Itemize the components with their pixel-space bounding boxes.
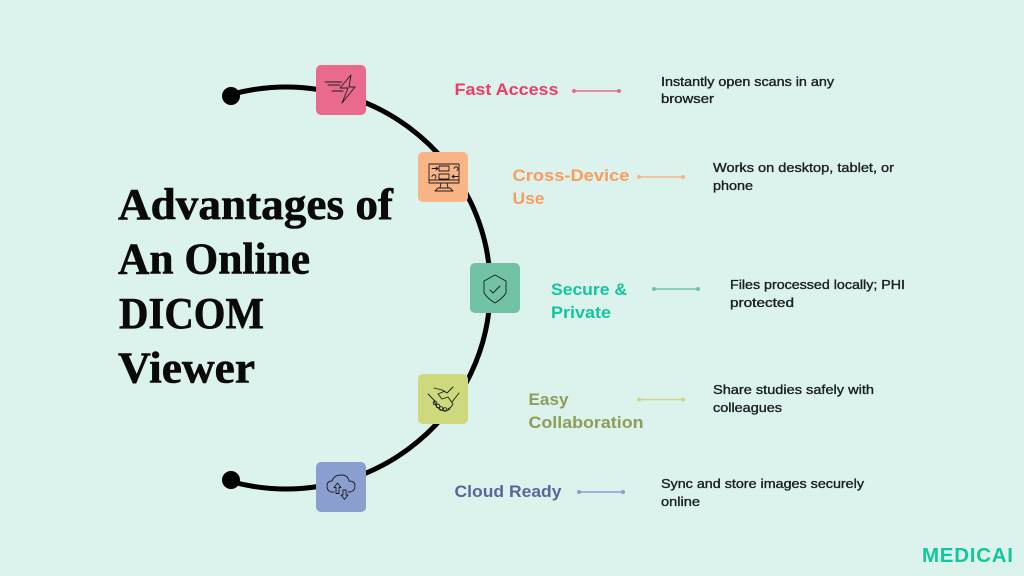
item: fast access [454, 75, 835, 106]
curved timeline arc [222, 87, 490, 489]
icon: lightning bolt [316, 65, 366, 115]
item: fast access: Instantly open scans in any [661, 75, 835, 89]
title: Viewer [118, 344, 255, 392]
item: cross-device use: Use [512, 190, 544, 208]
item: cloud ready [454, 477, 865, 509]
logo: medicai: MEDICAI [922, 544, 1013, 567]
item: easy collaboration: Share studies safely with [713, 383, 874, 397]
item: fast access: browser [661, 92, 714, 106]
item: fast access: Fast Access [454, 81, 558, 99]
item: cross-device use: Works on desktop, tablet, or [713, 161, 894, 175]
item: easy collaboration: Easy [528, 391, 569, 409]
item: cloud ready: Sync and store images securely [661, 477, 865, 491]
title: An Online [118, 234, 310, 284]
item: easy collaboration: Collaboration [528, 414, 644, 432]
item: easy collaboration: colleagues [713, 401, 782, 415]
item: cloud ready: online [661, 495, 700, 509]
item: secure and private: Secure & [551, 281, 627, 299]
item: secure and private: Files processed locally; PHI [730, 278, 905, 292]
icon: cloud upload download [316, 462, 366, 512]
icon: shield check [470, 263, 520, 313]
item: cross-device use: phone [713, 179, 753, 193]
icon: desktop monitor [418, 152, 468, 202]
item: secure and private: protected [730, 296, 794, 310]
title [118, 180, 394, 392]
item: easy collaboration [528, 383, 874, 432]
icon: handshake [418, 374, 468, 424]
item: secure and private [551, 278, 905, 322]
title: Advantages of [118, 180, 394, 229]
item: cross-device use: Cross-Device [512, 167, 630, 185]
title: DICOM [119, 289, 264, 338]
item: cloud ready: Cloud Ready [454, 483, 562, 501]
item: cross-device use [512, 161, 894, 208]
item: secure and private: Private [551, 304, 611, 322]
